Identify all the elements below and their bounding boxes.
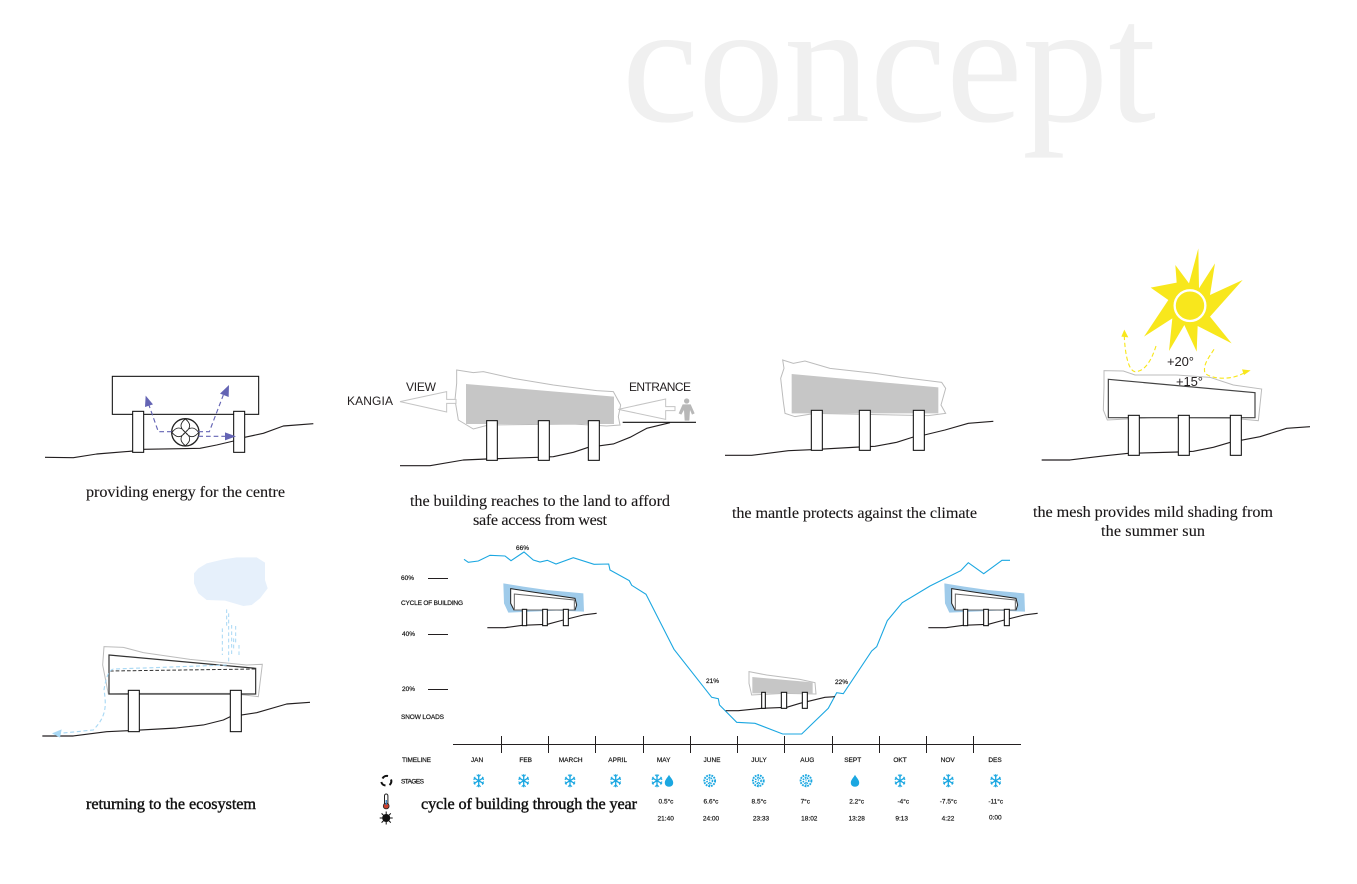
timeline axis [453,736,1021,753]
icon: sun [1144,248,1243,352]
building mass [466,384,614,424]
daylight hours: 18:02 [801,816,818,823]
icon: thermometer [383,794,389,809]
snow load curve [464,552,1010,734]
diagram: mantle protection [725,360,993,455]
mantle [1103,371,1262,421]
daylight hours: 9:13 [895,816,908,823]
data labels: 66% [516,545,529,552]
icon: daylight sun [380,812,393,824]
ground line [42,702,310,736]
ground line [45,424,313,458]
data labels: 22% [835,679,848,686]
daylight hours [658,814,1002,823]
building mass [792,374,938,413]
building: winter left [487,583,597,628]
caption: safe access [410,492,670,529]
mantle [455,370,621,429]
row labels: STAGES [401,778,425,786]
temperatures: 2.2°c [849,798,865,806]
month labels: DES [988,757,1002,764]
label: mantle temperature: +15° [1176,374,1203,389]
label: view: VIEW [406,380,437,394]
temperatures: 8.5°c [752,798,767,806]
temperatures: 0.5°c [659,798,674,806]
daylight hours: 24:00 [703,816,720,823]
diagram: returning to the ecosystem [42,557,310,738]
roof water layer [110,669,256,671]
stage icons [474,774,1001,787]
month labels [471,757,1002,764]
ground line [1042,427,1310,460]
columns [1128,415,1241,455]
label: Kangia: KANGIA [347,394,393,408]
building volume [112,376,259,414]
caption: providing energy: providing energy for the centre [86,483,285,501]
caption: mesh shading: the summer sun [1101,522,1205,540]
diagram: access from west [400,370,696,466]
y axis labels [401,575,463,721]
y axis labels: SNOW LOADS [401,714,445,721]
columns [133,411,245,452]
caption: mesh shading [1033,503,1273,540]
arrow: entrance [618,399,675,419]
y axis labels: 40% [402,631,415,638]
temperatures: 6.6°c [704,798,719,806]
daylight hours: 23:33 [753,816,770,823]
caption: safe access: the building reaches to the land to afford [410,492,670,510]
daylight hours: 0:00 [989,814,1002,822]
building: summer [726,672,835,711]
columns [487,421,599,460]
diagram: providing energy [45,376,313,458]
arrow: view [400,392,456,412]
temperatures: -11°c [988,798,1004,806]
building outline [1108,379,1255,418]
temperatures: -4°c [897,798,910,806]
month labels: MAY [657,757,671,764]
caption: cycle of building: cycle of building through the year [421,795,638,813]
building: winter right [928,583,1038,628]
ground line [725,421,993,455]
arrows: energy distribution [145,385,236,440]
columns [811,410,924,450]
daylight hours: 13:28 [849,816,865,823]
y axis labels: CYCLE OF BUILDING [401,600,463,607]
entrance level line [623,421,696,424]
caption: returning to the ecosystem: returning to the ecosystem [86,795,256,813]
y axis ticks [428,578,448,690]
y axis labels: 60% [401,575,414,582]
label: entrance: ENTRANCE [629,380,691,394]
month labels: OKT [893,757,907,764]
cloud [194,557,268,606]
daylight hours: 21:40 [658,816,674,823]
rain [222,609,239,663]
diagram: mesh shading [1042,248,1310,460]
data labels [516,545,848,686]
chart: snow load cycle [401,545,1038,753]
month labels: JULY [751,757,767,764]
icon: person [679,398,695,421]
icon: stages cycle [381,776,391,786]
ground line [400,423,670,466]
timeline table [380,757,1004,824]
month labels: JAN [471,757,483,764]
month labels: JUNE [704,757,721,764]
month labels: APRIL [608,757,627,764]
caption: mesh shading: the mesh provides mild shading from [1033,503,1273,521]
y axis labels: 20% [402,686,415,693]
month labels: SEPT [844,757,861,764]
month labels: MARCH [559,757,583,764]
month labels: FEB [519,757,532,764]
daylight hours: 4:22 [942,816,955,823]
label: summer temperature: +20° [1167,354,1194,369]
mantle [103,647,262,697]
caption: safe access: safe access from west [473,511,608,529]
data labels: 21% [706,678,719,685]
temperatures: 7°c [801,798,811,806]
icon: energy turbine [172,419,199,446]
row labels [401,757,432,786]
caption: mantle protects: the mantle protects against the climate [732,504,977,522]
arrows: reflected sunlight [1121,330,1251,378]
row labels: TIMELINE [402,757,432,764]
temperatures: -7.5°c [940,798,958,806]
month labels: NOV [941,757,955,764]
month labels: AUG [800,757,814,764]
building outline [109,655,256,694]
temperatures [659,798,1004,806]
mantle [781,360,946,417]
columns [128,690,241,732]
arrow: water runoff [52,665,227,738]
